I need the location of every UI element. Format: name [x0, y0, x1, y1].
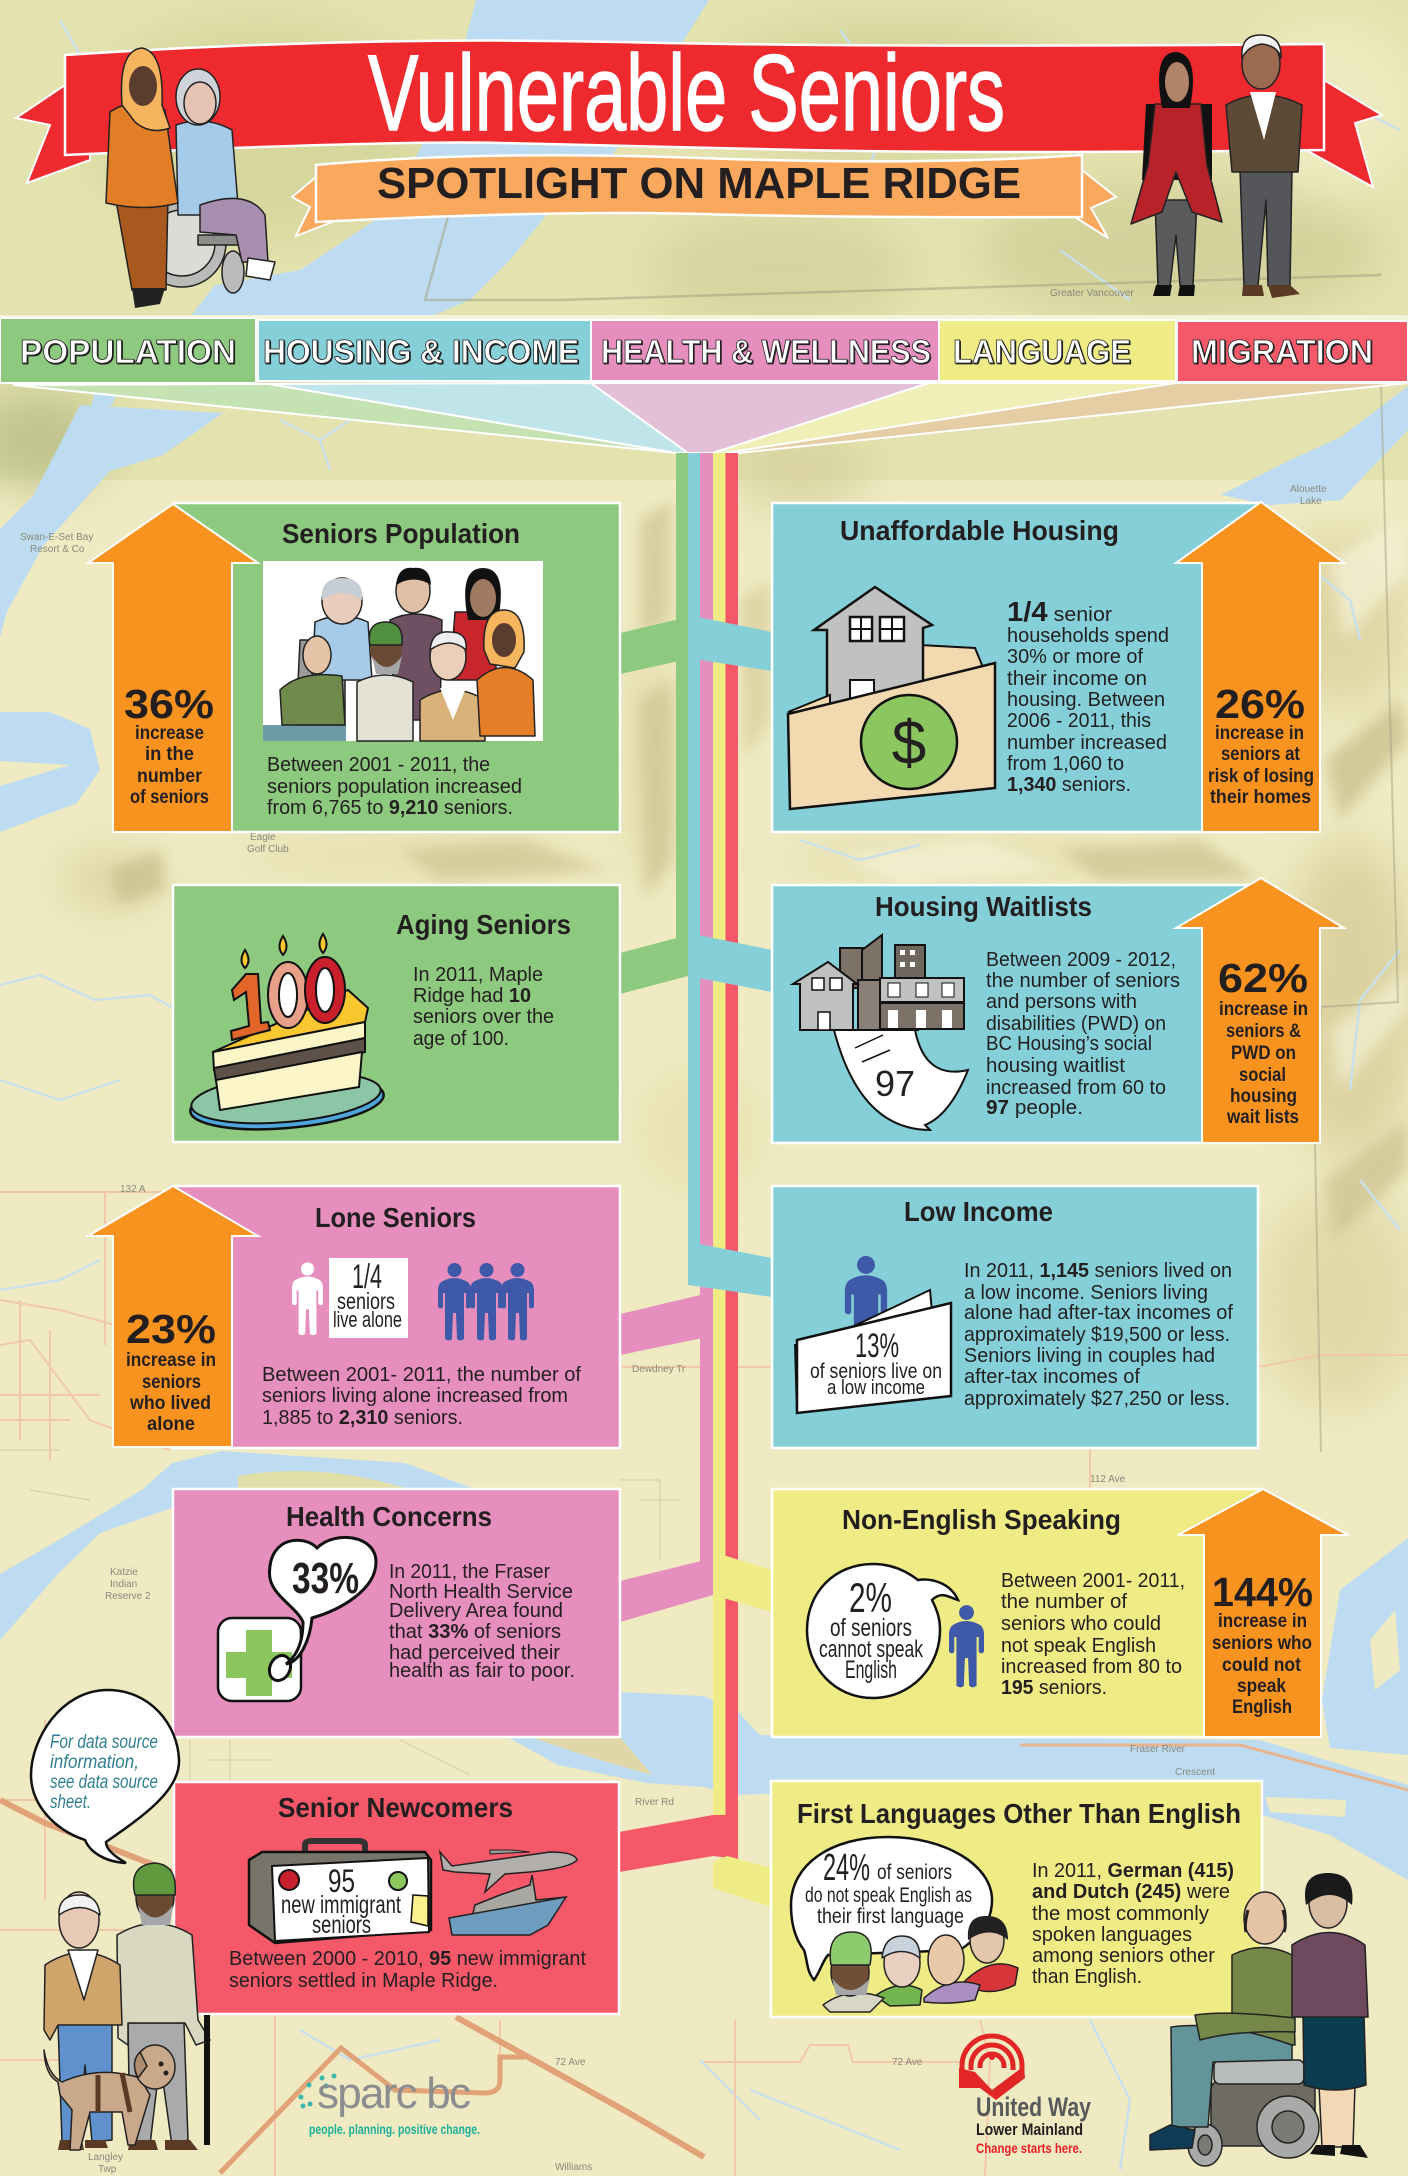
panel: lone seniors: 1,885 to 2,310 seniors. — [262, 1406, 463, 1429]
panel: first languages other than english: spoken languages — [1032, 1923, 1192, 1946]
map labels: Fraser River — [1130, 1744, 1186, 1755]
heading: Unaffordable Housing — [840, 515, 1119, 546]
body text: Between 2001 - 2011, the — [267, 753, 490, 776]
panel: unaffordable housing: number increased — [1007, 731, 1167, 754]
panel: health concerns: Delivery Area found — [389, 1599, 563, 1622]
tab: migration: MIGRATION — [1191, 333, 1373, 370]
heading: Health Concerns — [286, 1501, 492, 1532]
map labels: Greater Vancouver — [1050, 288, 1134, 299]
panel: aging seniors — [173, 885, 620, 1142]
panel: aging seniors: Ridge had 10 — [413, 984, 531, 1007]
heading: Low Income — [904, 1196, 1053, 1227]
arrow: 144% increase: seniors who — [1212, 1633, 1312, 1654]
tab: population — [0, 318, 256, 383]
heading: Senior Newcomers — [278, 1792, 513, 1823]
icon: one in four seniors live alone: seniors — [337, 1288, 395, 1314]
tab: housing and income: HOUSING & INCOME — [263, 333, 579, 370]
icon: birthday cake with 100 candles — [188, 934, 386, 1136]
tab: health and wellness — [591, 320, 939, 381]
map labels: Resort & Co — [30, 544, 85, 555]
arrow: 26% increase: 26% — [1215, 681, 1305, 727]
map labels: 72 Ave — [555, 2057, 586, 2068]
panel: housing waitlists: the number of seniors — [986, 969, 1180, 992]
tab: language: LANGUAGE — [953, 333, 1131, 370]
icon: one in four seniors live alone — [292, 1258, 534, 1340]
panel: non-english speaking: the number of — [1001, 1590, 1127, 1613]
arrow: 23% increase: who lived — [129, 1393, 211, 1414]
panel: aging seniors: age of 100. — [413, 1027, 509, 1050]
arrow: 36% increase: in the — [145, 744, 194, 765]
panel: housing waitlists: 97 people. — [986, 1096, 1083, 1119]
logo: united way — [959, 2036, 1091, 2156]
tab: population: POPULATION — [20, 333, 236, 370]
icon: airplane — [440, 1850, 577, 1892]
body text: Between 2000 - 2010, 95 new immigrant — [229, 1947, 586, 1970]
icon: speech bubble with four faces — [791, 1837, 1018, 2012]
arrow: 23% increase: increase in — [126, 1350, 216, 1371]
arrow: 23% increase: 23% — [126, 1306, 216, 1352]
body text: 1/4 senior — [1007, 596, 1112, 627]
map labels: Crescent — [1175, 1767, 1215, 1778]
heading: First Languages Other Than English — [797, 1798, 1241, 1829]
arrow: 144% increase — [1178, 1489, 1348, 1737]
panel: first languages other than english: among seniors other — [1032, 1944, 1215, 1967]
arrow: 36% increase: increase — [135, 723, 204, 744]
panel: low income: Seniors living in couples had — [964, 1344, 1215, 1367]
callout: data source speech bubble: For data source — [50, 1732, 158, 1753]
panel: low income — [772, 1186, 1258, 1448]
arrow: 62% increase: social — [1239, 1065, 1286, 1086]
illustration: woman in hijab and woman in wheelchair — [106, 48, 275, 308]
map labels: Golf Club — [247, 844, 289, 855]
icon: speech bubble with four faces: of seniors — [877, 1861, 952, 1884]
icon: speech bubble and person: 2% — [849, 1574, 892, 1621]
panel: seniors population — [173, 503, 620, 832]
connectors — [619, 615, 772, 1907]
roads — [0, 1192, 1408, 2176]
arrow: 26% increase: risk of losing — [1208, 766, 1314, 787]
arrow: 23% increase — [88, 1186, 258, 1447]
icon: speech bubble and person: English — [845, 1656, 897, 1684]
icon: first aid box with heart speech bubble: 33% — [292, 1554, 359, 1603]
banner: red title ribbon — [16, 41, 1382, 187]
icon: speech bubble and person — [807, 1564, 984, 1698]
tab: housing and income — [258, 320, 591, 381]
panel: low income: a low income. Seniors living — [964, 1281, 1208, 1304]
map labels: Alouette — [1290, 484, 1327, 495]
arrow: 26% increase: increase in — [1215, 723, 1304, 744]
logo: united way: Change starts here. — [976, 2140, 1082, 2156]
panel: housing waitlists: increased from 60 to — [986, 1076, 1166, 1099]
map labels: 72 Ave — [892, 2057, 923, 2068]
panel: low income: alone had after-tax incomes of — [964, 1301, 1233, 1324]
illustration: two men with guide dog and cane — [44, 1863, 210, 2150]
panel: unaffordable housing — [772, 503, 1261, 832]
panel: housing waitlists: disabilities (PWD) on — [986, 1012, 1166, 1035]
map labels: Lake — [1300, 496, 1322, 507]
heading: Aging Seniors — [396, 909, 571, 940]
icon: speech bubble and person: cannot speak — [819, 1636, 924, 1663]
map labels: 112 Ave — [1090, 1474, 1126, 1485]
funnel from tabs to coloured strips — [13, 383, 1408, 453]
body text: In 2011, German (415) — [1032, 1859, 1234, 1882]
arrow: 62% increase: PWD on — [1231, 1043, 1296, 1064]
panel: non-english speaking — [772, 1489, 1263, 1737]
icon: buildings and waiting list: 97 — [875, 1063, 915, 1104]
panel: health concerns: North Health Service — [389, 1580, 573, 1603]
title: Vulnerable Seniors — [368, 32, 1005, 153]
icon: suitcase: new immigrant — [281, 1891, 401, 1919]
heading: Housing Waitlists — [875, 891, 1092, 922]
icon: buildings and waiting list — [793, 935, 968, 1130]
panel: housing waitlists: BC Housing’s social — [986, 1032, 1152, 1055]
panel: first languages other than english: the most commonly — [1032, 1902, 1210, 1925]
panel: non-english speaking: 195 seniors. — [1001, 1676, 1107, 1699]
illustration: group of seniors — [263, 561, 543, 741]
map labels: Indian — [110, 1579, 137, 1590]
illustration: man in power chair and standing woman — [1150, 1873, 1368, 2166]
icon: ship — [449, 1875, 566, 1935]
logo: united way: United Way — [976, 2092, 1091, 2122]
body text: Between 2009 - 2012, — [986, 948, 1176, 971]
panel: health concerns: health as fair to poor. — [389, 1659, 575, 1682]
arrow: 62% increase: 62% — [1218, 955, 1308, 1001]
arrow: 26% increase: seniors at — [1221, 744, 1301, 765]
icon: person behind open wallet: 13% — [855, 1327, 899, 1365]
panel: housing waitlists: housing waitlist — [986, 1054, 1125, 1077]
navigation tabs — [0, 315, 1408, 383]
callout: data source speech bubble: sheet. — [50, 1792, 91, 1813]
tab: language — [939, 320, 1176, 381]
tab: migration — [1177, 321, 1408, 382]
panel: health concerns: had perceived their — [389, 1641, 560, 1664]
logo: sparc bc: people. planning. positive change. — [309, 2121, 480, 2137]
arrow: 62% increase: seniors & — [1226, 1021, 1301, 1042]
body text: Between 2001- 2011, the number of — [262, 1363, 581, 1386]
panel: first languages other than english: than English. — [1032, 1965, 1142, 1988]
panel: lone seniors — [173, 1186, 620, 1448]
panel: low income: approximately $19,500 or less. — [964, 1323, 1230, 1346]
panel: senior newcomers: seniors settled in Maple Ridge. — [229, 1969, 498, 1992]
subtitle ribbon — [292, 155, 1116, 238]
icon: suitcase: seniors — [312, 1911, 371, 1939]
coloured category strips — [676, 453, 738, 1859]
icon: one in four seniors live alone: 1/4 — [352, 1258, 382, 1296]
panel: lone seniors: seniors living alone increased from — [262, 1384, 568, 1407]
callout: data source speech bubble: see data source — [50, 1772, 158, 1793]
tab: health and wellness: HEALTH & WELLNESS — [601, 333, 931, 370]
map labels: Dewdney Tr — [632, 1364, 686, 1375]
map labels: Swan-E-Set Bay — [20, 532, 93, 543]
panel: unaffordable housing: households spend — [1007, 624, 1169, 647]
arrow: 62% increase: increase in — [1219, 999, 1308, 1020]
panel: seniors population: seniors population increased — [267, 775, 522, 798]
panel: health concerns — [173, 1489, 620, 1737]
body text: Between 2001- 2011, — [1001, 1569, 1185, 1592]
body text: In 2011, the Fraser — [389, 1560, 550, 1583]
panel: non-english speaking: not speak English — [1001, 1634, 1156, 1657]
logo: sparc bc — [298, 2069, 480, 2137]
illustration: couple standing at top right — [1131, 35, 1302, 298]
arrow: 62% increase: housing — [1230, 1086, 1297, 1107]
arrow: 36% increase: number — [137, 766, 203, 787]
icon: person behind open wallet: of seniors live on — [810, 1360, 942, 1383]
callout: data source speech bubble: information, — [50, 1752, 139, 1773]
arrow: 144% increase: 144% — [1212, 1569, 1313, 1615]
arrow: 62% increase — [1176, 878, 1344, 1143]
arrow: 144% increase: could not — [1222, 1655, 1302, 1676]
subtitle text: SPOTLIGHT ON MAPLE RIDGE — [377, 159, 1021, 208]
map labels: Katzie — [110, 1567, 138, 1578]
arrow: 36% increase — [88, 504, 258, 832]
panel: aging seniors: seniors over the — [413, 1005, 554, 1028]
map labels: Eagle — [250, 832, 276, 843]
panel: seniors population: from 6,765 to 9,210 seniors. — [267, 796, 513, 819]
panel: low income: after-tax incomes of — [964, 1365, 1140, 1388]
arrow: 144% increase: speak — [1237, 1676, 1286, 1697]
map labels: 132 A — [120, 1184, 146, 1195]
body text: In 2011, 1,145 seniors lived on — [964, 1259, 1232, 1282]
icon: one in four seniors live alone: live alone — [333, 1307, 402, 1332]
map labels: Twp — [98, 2164, 117, 2175]
map labels: Langley — [88, 2152, 123, 2163]
heading: Seniors Population — [282, 518, 520, 549]
panel: unaffordable housing: from 1,060 to — [1007, 752, 1124, 775]
panel: unaffordable housing: 1,340 seniors. — [1007, 773, 1131, 796]
map labels: Reserve 2 — [105, 1591, 151, 1602]
heading: Non-English Speaking — [842, 1504, 1121, 1535]
panel: first languages other than english — [771, 1781, 1262, 2017]
logo: sparc bc: sparc bc — [317, 2069, 471, 2118]
callout: data source speech bubble — [31, 1690, 179, 1863]
icon: speech bubble with four faces: their first language — [817, 1905, 964, 1928]
body text: In 2011, Maple — [413, 963, 543, 986]
icon: speech bubble and person: of seniors — [830, 1614, 912, 1642]
map labels: Williams — [555, 2162, 592, 2173]
panel: non-english speaking: increased from 80 to — [1001, 1655, 1182, 1678]
panel: unaffordable housing: housing. Between — [1007, 688, 1165, 711]
panel: unaffordable housing: their income on — [1007, 667, 1147, 690]
arrow: 144% increase: English — [1232, 1697, 1292, 1718]
map labels: River Rd — [635, 1797, 674, 1808]
panel: first languages other than english: and Dutch (245) were — [1032, 1880, 1230, 1903]
panel: housing waitlists: and persons with — [986, 990, 1137, 1013]
arrow: 62% increase: wait lists — [1226, 1107, 1299, 1128]
panel: housing waitlists — [772, 885, 1261, 1143]
heading: Lone Seniors — [315, 1202, 476, 1233]
icon: suitcase: 95 — [328, 1863, 355, 1899]
icon: speech bubble with four faces: do not speak English as — [805, 1884, 972, 1907]
arrow: 23% increase: seniors — [142, 1372, 201, 1393]
arrow: 36% increase: of seniors — [130, 787, 209, 808]
panel: senior newcomers — [174, 1782, 619, 2014]
panel: unaffordable housing: 2006 - 2011, this — [1007, 709, 1151, 732]
panel: unaffordable housing: 30% or more of — [1007, 645, 1143, 668]
arrow: 23% increase: alone — [147, 1414, 195, 1435]
logo: united way: Lower Mainland — [976, 2120, 1083, 2139]
panel: non-english speaking: seniors who could — [1001, 1612, 1161, 1635]
arrow: 36% increase: 36% — [124, 681, 214, 727]
icon: suitcase — [249, 1841, 431, 1943]
arrow: 26% increase — [1176, 502, 1344, 832]
panel: low income: approximately $27,250 or less. — [964, 1387, 1230, 1410]
icon: house in wallet with dollar coin — [788, 587, 995, 809]
map labels: Golden — [250, 820, 282, 831]
icon: first aid box with heart speech bubble — [218, 1537, 376, 1701]
icon: person behind open wallet — [795, 1256, 951, 1414]
arrow: 26% increase: their homes — [1210, 787, 1311, 808]
icon: person behind open wallet: a low income — [827, 1377, 925, 1399]
icon: house in wallet with dollar coin: $ — [892, 709, 926, 778]
panel: health concerns: that 33% of seniors — [389, 1620, 561, 1643]
arrow: 144% increase: increase in — [1218, 1611, 1307, 1632]
icon: speech bubble with four faces: 24% — [823, 1847, 870, 1889]
